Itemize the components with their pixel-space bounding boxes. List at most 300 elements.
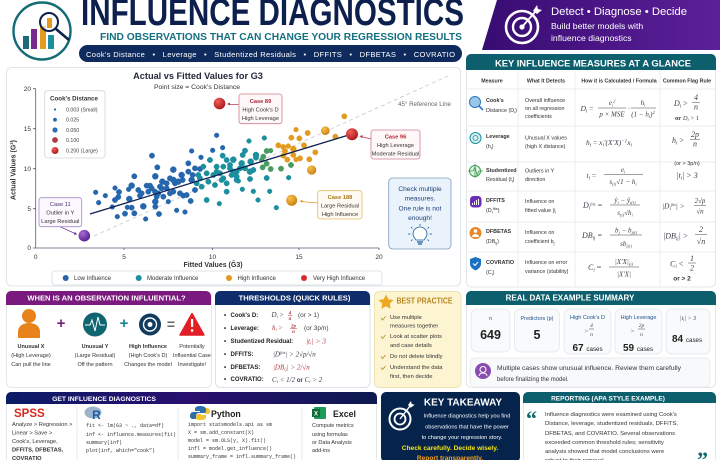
row: studentized residual: √: [616, 178, 620, 186]
regression line: [90, 134, 352, 214]
report text: DFBETAS, and COVRATIO. Several observations: [545, 431, 675, 437]
row: DFBETAS: j: [553, 240, 555, 246]
threshold values: or C: [297, 376, 309, 384]
row: DFFITS: h: [628, 209, 632, 217]
row: Cook's distance: ): [649, 110, 653, 118]
row: Cook's distance: >: [681, 99, 688, 108]
row: DFFITS: i: [618, 200, 620, 205]
row: DFFITS: i: [492, 210, 493, 214]
row: leverage: ′(X′X): [604, 138, 622, 147]
SPSS block: Analyze > Regression >: [12, 422, 73, 428]
row: DFBETAS: ij: [676, 237, 679, 242]
row: COVRATIO: |X′X|: [615, 258, 629, 266]
chart subtitle: Point size = Cook's Distance: [154, 84, 240, 91]
influence colour legend: Moderate Influence: [147, 276, 199, 282]
report text: analysis showed that model conclusions were: [545, 449, 665, 455]
row: leverage: Leverage: [486, 134, 510, 140]
plus: +: [120, 315, 129, 332]
threshold list labels: [224, 313, 293, 383]
threshold values: i: [310, 341, 312, 346]
row: DFFITS: Influence on: [525, 199, 554, 205]
card: high Cook's D: High Cook's D: [570, 315, 605, 321]
callout: case 89: High Cook's D: [242, 108, 279, 114]
card: n: n: [489, 316, 492, 322]
panel: when is an observation influential: [6, 291, 212, 388]
label: potentially influential: Influential Case: [173, 353, 211, 359]
table column headers: How it is Calculated / Formula: [581, 78, 657, 84]
threshold list labels: Studentized Residual:: [230, 339, 293, 345]
row: DFFITS: (D: [486, 208, 492, 214]
row: COVRATIO: or > 2: [673, 276, 691, 282]
threshold values: i: [276, 327, 278, 332]
measures pill: [79, 45, 462, 62]
threshold values: n: [289, 317, 292, 322]
row: studentized residual: i: [681, 176, 683, 182]
row: leverage: ): [492, 144, 494, 150]
threshold list labels: •: [224, 326, 226, 332]
point: case 96: [346, 128, 358, 140]
row: COVRATIO: 2: [690, 264, 694, 272]
Python block: Python: [211, 409, 241, 419]
banner: detect diagnose decide: Detect • Diagnose • Decide: [551, 6, 687, 18]
table column headers: [481, 78, 711, 84]
R block: [84, 406, 176, 454]
callout: case 96: [360, 130, 420, 159]
note: review cases: Multiple cases show unusual influence. Review them carefully: [497, 366, 681, 372]
card: t above 3: [666, 309, 710, 354]
R block: summary(inf): [86, 440, 122, 446]
card: predictors: 5: [534, 328, 541, 342]
label: unusual Y: [75, 344, 115, 368]
row: DFFITS: i: [555, 210, 556, 214]
Python block: infl = model.get_influence(): [188, 446, 272, 452]
threshold list labels: •: [224, 377, 226, 383]
SPSS block: SPSS: [14, 408, 45, 420]
row: Cook's distance: Distance (D: [486, 108, 514, 114]
row: Cook's distance: D: [580, 104, 586, 113]
row: DFFITS: − ŷ: [619, 196, 631, 204]
checklist: first, then decide: [390, 374, 433, 380]
row: studentized residual: Studentized: [486, 168, 517, 174]
row: studentized residual: (i): [612, 182, 617, 186]
row: DFBETAS: ): [497, 239, 499, 245]
threshold values: [270, 311, 329, 384]
callout: check multiple measures: [389, 178, 451, 249]
row: COVRATIO: ): [493, 270, 495, 276]
reference line label: 45° Reference Line: [398, 102, 452, 108]
row: Cook's distance: 2: [613, 98, 616, 104]
threshold list labels: Cook's D:: [230, 313, 258, 319]
row: Cook's distance: 4: [694, 93, 698, 102]
influence colour legend: [52, 271, 382, 285]
threshold values: (or > 1): [298, 312, 319, 319]
row: DFFITS: 2√p: [695, 197, 706, 205]
equals: =: [167, 316, 175, 332]
axes: [10, 86, 383, 269]
callout: case 188: High Influence: [322, 212, 358, 218]
row: DFFITS: | >: [676, 202, 685, 210]
card: high leverage: 2p: [639, 323, 644, 329]
axes: 10: [24, 166, 31, 173]
row: studentized residual: direction: [525, 177, 545, 183]
row: Cook's distance: ·: [628, 104, 630, 112]
row: DFBETAS: =: [595, 231, 602, 240]
row: DFBETAS: [470, 225, 707, 248]
threshold list labels: DFBETAS:: [230, 365, 260, 371]
checklist: and case details: [390, 343, 432, 349]
row: leverage: (h: [486, 144, 491, 150]
row: Cook's distance: Overall influence: [525, 98, 565, 104]
row: COVRATIO: variance (stability): [525, 269, 569, 275]
reference line 45 degrees: [94, 76, 448, 236]
threshold values: |t: [306, 336, 310, 346]
row: DFFITS: i: [669, 207, 671, 212]
axes: Fitted Values (Ĝ3): [183, 260, 243, 269]
row: DFFITS: i: [632, 212, 634, 218]
checklist: [381, 315, 443, 380]
threshold values: n: [292, 330, 295, 335]
threshold values: >: [277, 324, 283, 332]
green points: [259, 148, 294, 172]
threshold list labels: •: [224, 365, 226, 371]
label: potentially influential: Investigate!: [178, 362, 207, 368]
checklist: Use multiple: [390, 315, 422, 321]
panel: thresholds: [215, 291, 370, 388]
checklist: measures together: [390, 324, 438, 330]
card: n: [471, 309, 510, 352]
row: leverage: i: [602, 144, 604, 148]
row: leverage: i: [676, 142, 678, 146]
row: COVRATIO: |X′X|: [617, 270, 631, 278]
influence colour legend: Low Influence: [74, 276, 112, 282]
panel: reporting: [523, 392, 716, 460]
row: COVRATIO: (i): [629, 262, 634, 266]
Excel block: X: [314, 412, 318, 418]
row: studentized residual: |t: [676, 171, 681, 180]
Python block: import statsmodels.api as sm: [188, 422, 272, 428]
R block: plot(inf, which="cook"): [86, 448, 155, 454]
label: unusual Y: (Large Residual): [75, 353, 115, 359]
Excel block: Compute metrics: [312, 423, 354, 429]
label: high influence: High Influence: [129, 344, 167, 350]
axes: 20: [24, 86, 31, 93]
teal points: [194, 136, 291, 210]
panel: key influence measures table: [466, 54, 716, 287]
row: DFBETAS: Influence on: [525, 230, 554, 236]
row: DFFITS: fits: [493, 206, 498, 211]
blue points: [93, 133, 225, 221]
threshold list labels: •: [224, 339, 226, 345]
row: studentized residual: i: [635, 182, 637, 186]
row: studentized residual: t: [586, 171, 589, 180]
row: DFBETAS: √n: [697, 237, 705, 246]
card: t above 3: |t: [680, 316, 683, 322]
callout: case 188: Large Residual: [321, 204, 359, 210]
row: leverage: i: [590, 144, 592, 148]
report text: Distance, leverage, studentized residuals, DFFITS,: [545, 421, 678, 427]
row: DFBETAS: b: [615, 226, 618, 234]
Excel block: [312, 407, 356, 454]
heading: BEST PRACTICE: [396, 296, 452, 305]
row: COVRATIO: (C: [486, 270, 492, 276]
row: DFBETAS: | >: [679, 232, 688, 240]
row: Cook's distance: e: [609, 99, 612, 107]
header logo: magnifier over bars: [14, 2, 70, 60]
panel: real data example: [466, 291, 716, 388]
row: leverage: −1: [621, 140, 627, 144]
callout: case 11: [39, 198, 82, 235]
threshold list labels: COVRATIO:: [230, 377, 264, 383]
row: studentized residual: i: [512, 178, 513, 184]
callout: case 11: Case 11: [50, 202, 71, 208]
card: t above 3: | > 3: [684, 316, 696, 322]
Python block: model = sm.OLS(y, X).fit(): [188, 438, 266, 444]
callout: case 11: Large Residual: [41, 219, 79, 225]
row: Cook's distance: i: [644, 102, 646, 108]
cook's distance legend: 0.025: [66, 118, 79, 124]
row: leverage: x: [626, 138, 631, 147]
row: Cook's distance: on all regression: [525, 106, 565, 112]
axes: 10: [209, 254, 216, 261]
heading: key measures: KEY INFLUENCE MEASURES AT A GLANCE: [495, 58, 691, 68]
threshold values: i: [277, 379, 279, 384]
icon: target: [506, 5, 542, 43]
takeaway text: Influence diagnostics help you find: [424, 414, 510, 420]
heading: WHEN IS AN OBSERVATION INFLUENTIAL?: [27, 294, 186, 303]
callout: case 188: [300, 191, 362, 219]
threshold values: h: [272, 324, 276, 332]
row: DFBETAS: coefficient b: [525, 239, 554, 245]
row: DFBETAS: |DB: [663, 232, 676, 240]
row: Cook's distance: i: [688, 117, 690, 122]
row: DFBETAS: j: [618, 230, 620, 235]
label: unusual X: [11, 344, 51, 368]
row: DFBETAS: sb: [620, 240, 626, 248]
axes: 0: [34, 254, 38, 261]
label: high influence: Changes the model: [124, 362, 172, 368]
row: Cook's distance: coefficients: [525, 114, 552, 120]
card: t above 3: i: [683, 317, 684, 322]
card: high leverage: >: [630, 328, 634, 335]
row: studentized residual: i: [624, 170, 626, 174]
row: leverage: (or > 3p/n): [674, 161, 700, 167]
row: studentized residual: | > 3: [682, 171, 698, 180]
row: DFFITS: =: [596, 201, 603, 210]
row: COVRATIO: i: [675, 265, 677, 270]
row: Cook's distance: Cook's: [486, 98, 504, 104]
plus: +: [57, 315, 66, 332]
row: DFFITS: fitted value ŷ: [525, 208, 555, 214]
row: Cook's distance: i: [680, 104, 682, 110]
subtitle: FIND OBSERVATIONS THAT CAN CHANGE YOUR REGRESSION RESULTS: [100, 31, 462, 43]
takeaway text: observations that have the power: [425, 424, 509, 430]
row: DFBETAS: ij: [593, 236, 596, 242]
checklist: Do not delete blindly: [390, 354, 443, 360]
row: DFFITS: DFFITS: [486, 198, 505, 204]
threshold values: C: [272, 376, 277, 384]
threshold values: |DB: [273, 364, 284, 372]
panel: best practice: [374, 292, 461, 388]
row: studentized residual: Outliers in Y: [525, 168, 555, 174]
R block: fit <- lm(G3 ~ ., data=df): [86, 423, 164, 429]
Excel block: Excel: [333, 409, 356, 419]
heading: REPORTING (APA STYLE EXAMPLE): [551, 396, 665, 402]
callout: case 89: Case 89: [250, 99, 271, 105]
card: high leverage: n: [640, 332, 643, 338]
cook's distance legend: 0.200 (Large): [66, 148, 98, 154]
row: DFBETAS: (DB: [486, 239, 495, 245]
orange points: [276, 114, 347, 175]
SPSS block: Linear > Save >: [12, 430, 53, 436]
heading: REAL DATA EXAMPLE SUMMARY: [506, 294, 635, 303]
card: high Cook's D: 4: [590, 322, 593, 329]
row: DFBETAS: ij: [495, 240, 497, 246]
row: DFBETAS: 2: [699, 225, 703, 234]
row: DFBETAS: j(i): [630, 230, 637, 235]
row: DFFITS: D: [583, 201, 589, 210]
callout: case 188: Case 188: [328, 195, 352, 201]
callout: case 96: High Leverage: [377, 143, 414, 149]
row: Cook's distance: i: [612, 102, 614, 108]
row: COVRATIO: <: [677, 260, 684, 268]
row: DFFITS: i(i): [630, 200, 636, 205]
row: leverage: =: [591, 138, 599, 147]
cook's distance legend: 0.100: [66, 138, 79, 144]
row: studentized residual: 1 − h: [620, 178, 635, 186]
cook's distance legend: 0.003 (Small): [66, 108, 98, 114]
threshold values: |D: [273, 350, 280, 358]
heading: GET INFLUENCE DIAGNOSTICS: [52, 396, 156, 403]
threshold values: 4: [288, 312, 292, 316]
threshold values: i: [309, 379, 311, 384]
threshold values: (or 3p/n): [304, 325, 329, 332]
row: Cook's distance: h: [641, 99, 644, 107]
threshold values: < 1/2: [278, 376, 297, 384]
SPSS block: DFFITS, DFBETAS,: [12, 448, 63, 454]
row: DFBETAS: DFBETAS: [486, 229, 511, 235]
row: Cook's distance: p × MSE: [598, 110, 625, 118]
callout: case 89: [227, 94, 282, 124]
row: leverage: >: [677, 136, 684, 145]
point: case 188: [286, 195, 297, 206]
axes: 15: [24, 126, 31, 133]
row: leverage: i: [491, 146, 492, 150]
row: DFFITS: √n: [696, 208, 704, 216]
label: unusual X: (High Leverage): [11, 353, 51, 359]
heading: THRESHOLDS (QUICK RULES): [239, 294, 351, 303]
threshold values: > 2: [310, 376, 323, 384]
row: Cook's distance: > 1: [689, 115, 699, 122]
row: studentized residual: i: [589, 176, 591, 182]
row: COVRATIO: C: [588, 263, 593, 272]
point: case 89: [214, 98, 225, 109]
row: COVRATIO: 1: [690, 254, 694, 263]
chart title: Actual vs Fitted Values for G3: [133, 71, 263, 81]
axes: 5: [122, 254, 126, 261]
card: high Cook's D: n: [590, 332, 593, 338]
row: DFFITS: (i): [620, 212, 625, 218]
card: high leverage: 59 cases: [623, 343, 653, 354]
card: high Cook's D: >: [584, 328, 588, 335]
Excel block: add-ins: [312, 448, 330, 454]
row: COVRATIO: COVRATIO: [486, 260, 514, 266]
cook's distance legend: Cook's Distance: [50, 96, 98, 103]
threshold list labels: •: [224, 313, 226, 319]
threshold list labels: Leverage:: [230, 326, 259, 332]
Python block: summary_frame = infl.summary_frame(): [188, 454, 296, 460]
row: leverage: h: [586, 138, 590, 147]
R block: R: [92, 408, 101, 422]
report text: exceeded common threshold rules; sensitivity: [545, 440, 664, 446]
row: leverage: i: [631, 144, 633, 148]
SPSS block: Cook's, Leverage,: [12, 439, 58, 445]
row: Cook's distance: i: [514, 110, 515, 114]
icon: pulse: [83, 312, 107, 336]
threshold values: | > 2√p/√n: [286, 350, 316, 358]
report text: Influence diagnostics were examined using Cook's: [545, 412, 677, 418]
row: DFBETAS: j(i): [625, 244, 632, 248]
axes: Actual Values (G³): [10, 140, 18, 200]
axes: 5: [27, 206, 31, 213]
callout: case 96: Moderate Residual: [372, 152, 419, 158]
threshold values: | > 3: [311, 336, 326, 346]
row: COVRATIO: [470, 254, 696, 282]
panel: scatter chart: [6, 68, 460, 286]
threshold list labels: •: [224, 352, 226, 358]
row: leverage: Unusual X values: [525, 136, 567, 142]
threshold values: i: [277, 314, 279, 319]
threshold values: >: [278, 311, 284, 319]
measures pill: Cook's Distance • Leverage • Studentized Residuals • DFFITS • DFBETAS • COVRATIO: [86, 50, 455, 59]
row: Cook's distance: (1 − h: [631, 110, 649, 118]
label: unusual X: Can pull the line: [11, 362, 51, 368]
checklist: Look at scatter plots: [390, 334, 442, 340]
panel: get influence diagnostics: [6, 392, 377, 460]
row: Cook's distance: n: [694, 102, 698, 112]
point: case 11: [78, 230, 90, 242]
table column headers: What It Detects: [527, 78, 565, 84]
row: DFFITS: i: [589, 206, 591, 212]
axes: 20: [375, 254, 383, 261]
row: Cook's distance: i: [586, 110, 588, 114]
row: DFFITS: fits: [590, 202, 596, 206]
callout: check multiple measures: One rule is not: [399, 206, 442, 212]
card: high leverage: High Leverage: [621, 315, 656, 321]
Python block: X = sm.add_constant(X): [188, 430, 254, 436]
cook's distance legend: 0.050: [66, 128, 79, 134]
checklist: Understand the data: [390, 365, 443, 371]
report text: [545, 412, 678, 460]
row: DFFITS: √: [624, 209, 628, 217]
banner: detect diagnose decide: Build better models with: [551, 21, 643, 31]
callout: case 89: High Leverage: [242, 116, 279, 122]
row: leverage: (high X distance): [525, 144, 566, 150]
SPSS block: [12, 408, 73, 460]
card: high leverage: [615, 309, 662, 354]
card: n: 649: [480, 328, 501, 342]
banner: detect diagnose decide: [482, 0, 720, 50]
row: COVRATIO: i: [593, 268, 595, 274]
icon: light bulb: [408, 224, 432, 244]
icon: target: [139, 314, 161, 336]
table column headers: Common Flag Rule: [663, 78, 711, 84]
takeaway text: Check carefully. Decide wisely.: [402, 445, 498, 452]
row: studentized residual: Residual (t: [486, 177, 512, 183]
label: high influence: (High Cook's D): [129, 353, 167, 359]
row: Cook's distance: =: [587, 104, 593, 113]
label: potentially influential: [173, 344, 211, 368]
row: Cook's distance: 2: [652, 110, 655, 115]
